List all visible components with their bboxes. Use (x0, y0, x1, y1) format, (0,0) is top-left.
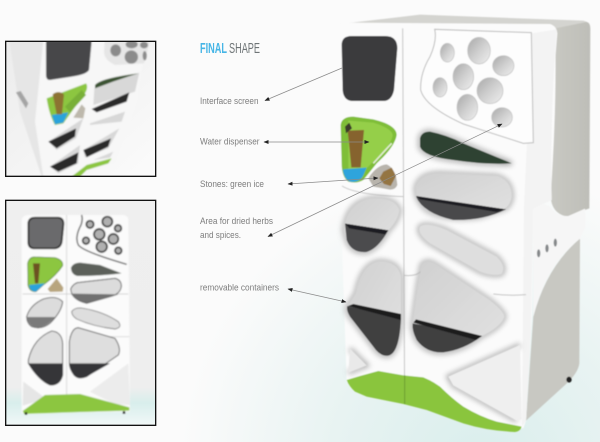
t2 big left (28, 331, 63, 385)
dispenser water tray (343, 168, 367, 182)
t2 cylinder (33, 263, 40, 283)
thumb stones (73, 104, 85, 118)
label: dried herbs (200, 216, 273, 240)
thumb cylinder (53, 92, 64, 114)
label: dried herbs: and spices. (200, 230, 241, 240)
t2 green base (23, 394, 129, 414)
t2 holes (83, 217, 122, 254)
illustration: main appliance (336, 15, 590, 432)
t2 water (29, 283, 45, 292)
t2 cavity 2 (27, 297, 63, 328)
thumb cavities (48, 73, 139, 173)
removable container left (347, 261, 401, 356)
front body (336, 23, 557, 428)
connector band (533, 200, 586, 317)
t2 big right fill (69, 363, 110, 378)
thumbnail: perspective view (5, 40, 156, 177)
door seams (342, 186, 526, 295)
t2 cavity 1 fill (71, 294, 118, 303)
dark green cavity (420, 132, 512, 164)
arrow: interface screen (265, 68, 342, 100)
herb holes (433, 37, 514, 127)
appliance top (340, 15, 590, 32)
water dispenser (341, 117, 397, 183)
arrow: dried herbs (268, 124, 502, 236)
t2 big left fill (28, 363, 63, 385)
cavity shadows (344, 132, 520, 421)
t2 lower cutouts (23, 382, 43, 406)
dispenser cylinder (348, 130, 364, 167)
title: FINAL (200, 40, 227, 57)
t2 body (22, 215, 130, 413)
thumb containers (48, 92, 129, 172)
t2 dark cavity (71, 263, 122, 276)
arrow: removable containers (288, 289, 346, 302)
thumb herb panel (104, 41, 150, 65)
t2 frame (6, 200, 156, 425)
thumb water (52, 112, 68, 124)
removable container right (412, 262, 504, 352)
t2 dispenser (28, 257, 63, 292)
lower cutouts (348, 349, 367, 373)
green base (347, 371, 522, 432)
t2 big right (69, 328, 119, 378)
dispenser slot (373, 143, 392, 163)
thumb screen (46, 41, 92, 80)
side panel lower (526, 239, 580, 421)
arrow: stones (288, 178, 378, 184)
t2 cavity 3 (72, 308, 120, 329)
t2 panel outline (77, 215, 127, 264)
dispenser nozzle (345, 123, 352, 133)
label: removable containers: removable containers (200, 282, 279, 292)
t2 seams (23, 215, 129, 412)
door seam (403, 28, 405, 403)
arrow: water dispenser (264, 141, 369, 143)
dispenser green highlight (348, 121, 393, 170)
thumb dark green cavity (95, 73, 138, 88)
interface screen (342, 36, 397, 101)
side panel upper (551, 22, 590, 217)
label: water dispenser: Water dispenser (200, 136, 260, 146)
storage cavity 1 (416, 173, 512, 220)
t2 screen (28, 218, 63, 248)
t2 feet (25, 412, 27, 415)
t2 cavity 2 fill (27, 317, 55, 328)
t2 stones (48, 278, 63, 292)
herb panel (421, 29, 533, 143)
title: SHAPE (229, 40, 260, 57)
thumb handle (16, 91, 28, 108)
foot (566, 377, 572, 383)
storage cavity 2 (344, 198, 399, 252)
thumb body side (16, 47, 43, 176)
thumb slot (65, 90, 86, 112)
thumb body front (35, 42, 134, 176)
label: interface screen: Interface screen (200, 96, 258, 106)
label: stones: Stones: green ice (200, 179, 264, 189)
thumb herb holes (110, 40, 148, 64)
thumb frame (6, 41, 156, 176)
stones: green ice (368, 164, 397, 190)
vent holes (537, 239, 557, 257)
storage cavity 3 (419, 225, 503, 275)
thumbnail: front view (5, 200, 156, 426)
thumb dispenser (47, 83, 87, 125)
t2 cavity 1 (71, 278, 121, 303)
thumb green base (72, 158, 112, 177)
right bevel (522, 29, 557, 427)
label: dried herbs: Area for dried herbs (200, 216, 273, 226)
